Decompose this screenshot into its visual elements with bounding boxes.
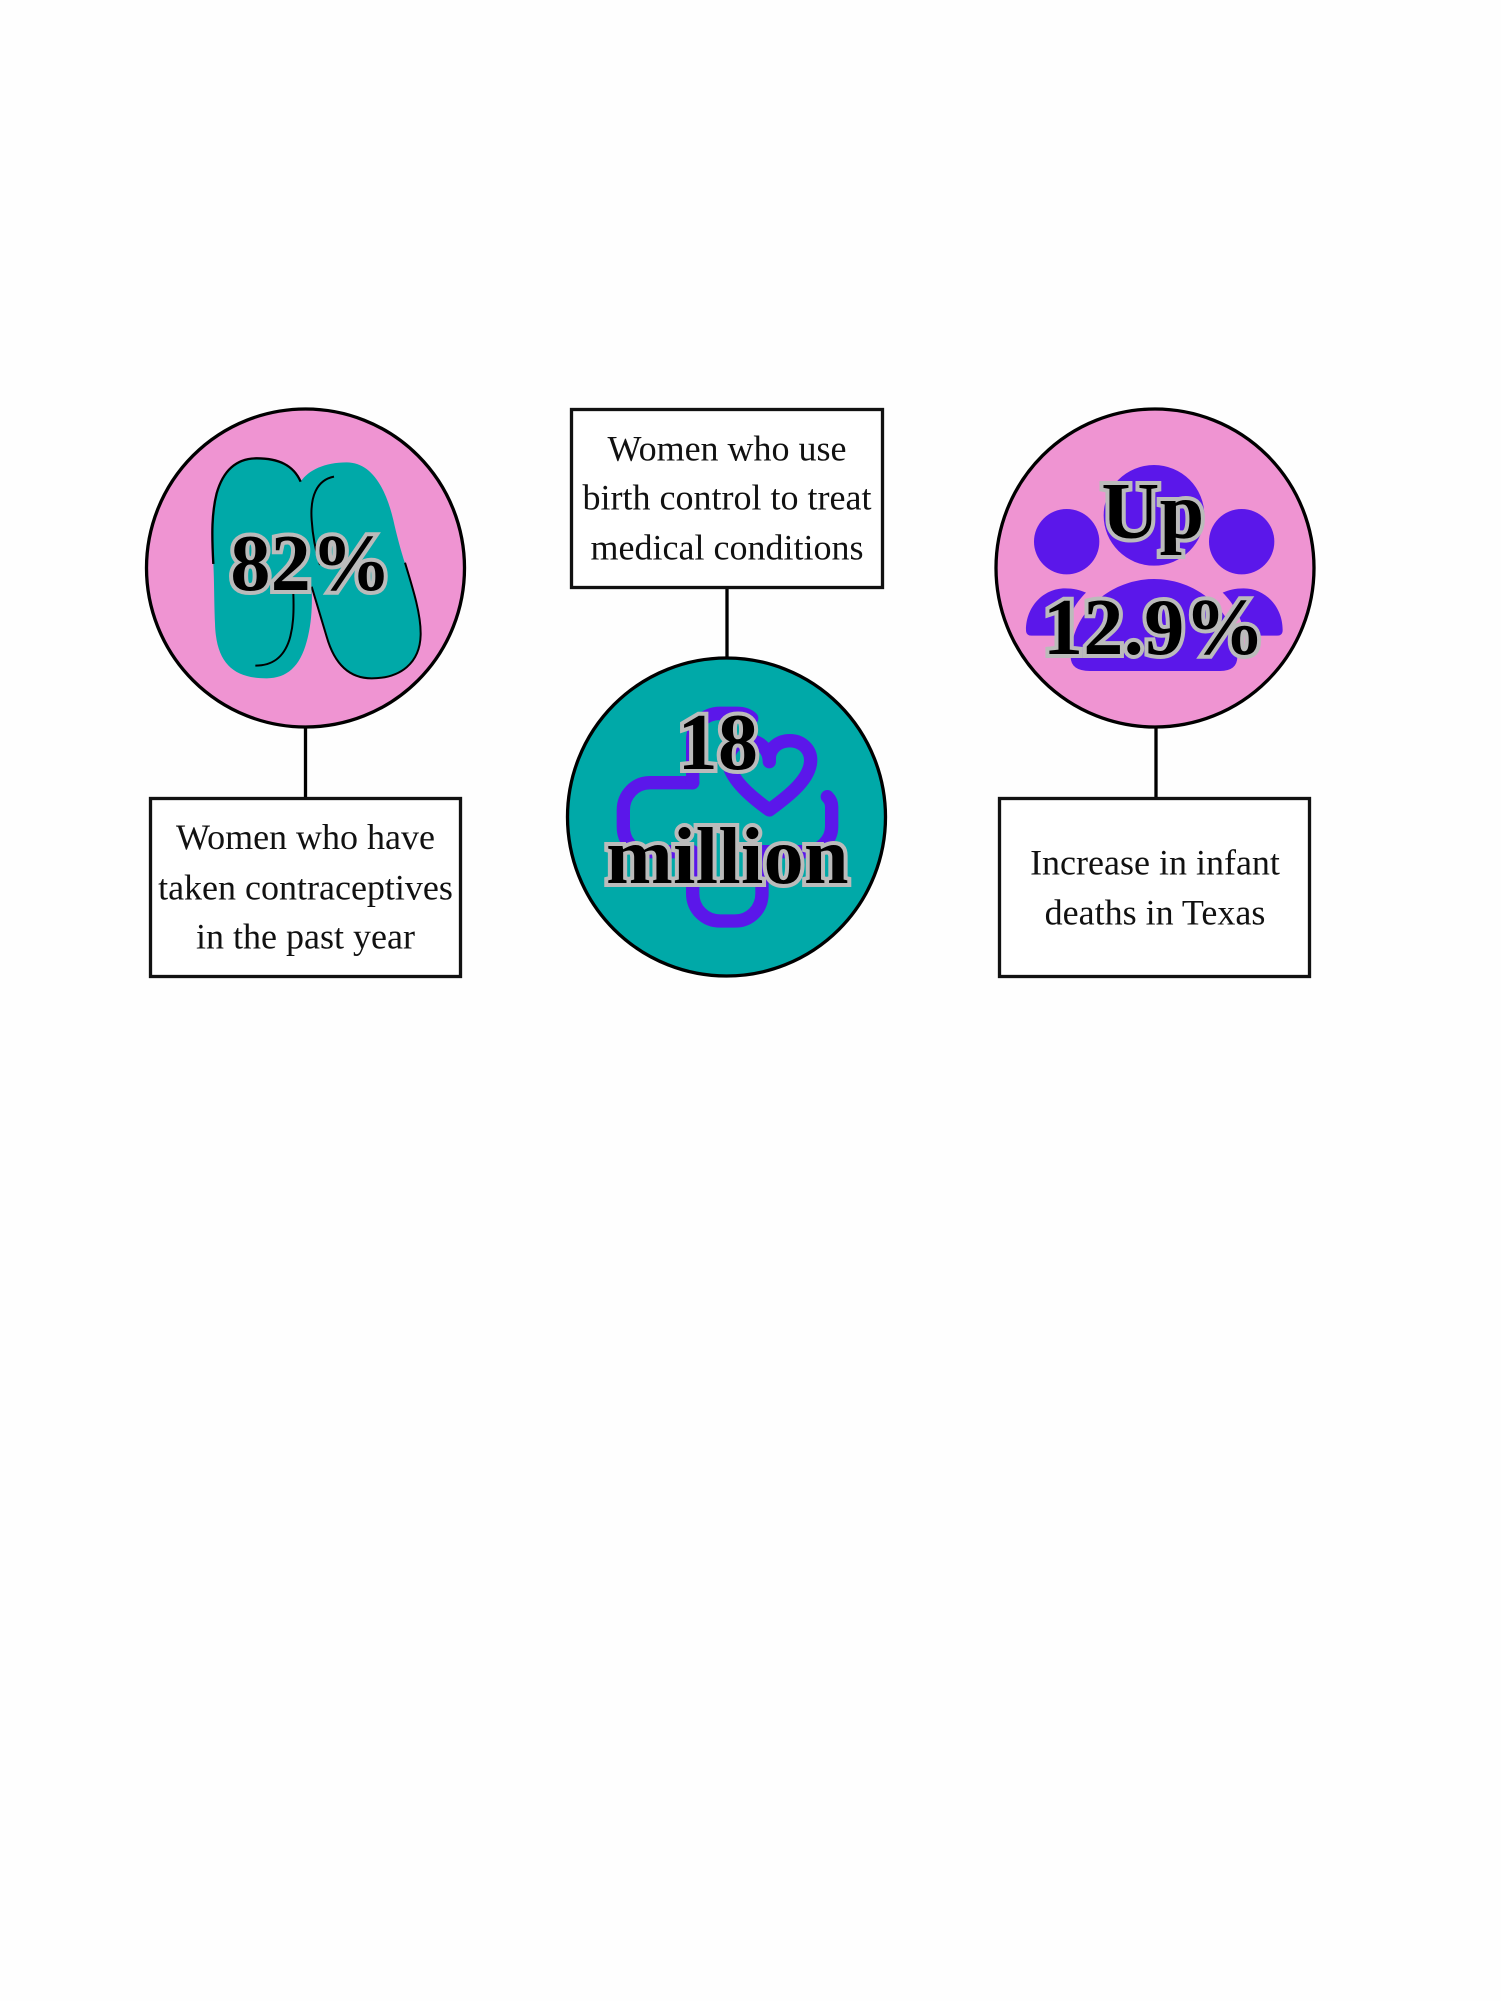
- panel: contraceptive use: [146, 409, 464, 976]
- caption box: [150, 798, 460, 976]
- stat: 18 million: [606, 699, 849, 901]
- panel: medical conditions: [568, 410, 886, 976]
- teal circle: [568, 658, 886, 976]
- pink circle: [996, 409, 1314, 727]
- stat: 18 million: million: [606, 813, 849, 901]
- stat: up 12.9%: [1043, 468, 1265, 672]
- icon: pills: [212, 458, 421, 678]
- caption box: medical conditions: [591, 528, 863, 568]
- pink circle: [146, 409, 464, 727]
- caption box: Women who use: [607, 428, 847, 468]
- caption box: Increase in infant: [1030, 842, 1280, 882]
- connector line: [725, 589, 729, 658]
- caption box: deaths in Texas: [1045, 892, 1265, 932]
- caption box: birth control to treat: [583, 478, 871, 518]
- icon: group of people: [1026, 465, 1283, 671]
- caption box: [572, 410, 882, 588]
- icon: cross with heart: [623, 713, 832, 921]
- stat: 18 million: 18: [678, 699, 758, 787]
- caption box: in the past year: [196, 916, 415, 956]
- caption box: taken contraceptives: [158, 868, 453, 908]
- stat: up 12.9%: Up: [1101, 468, 1205, 556]
- connector line: [1154, 728, 1158, 798]
- panel: infant deaths: [996, 409, 1314, 976]
- stat: 82%: 82%: [230, 520, 392, 608]
- caption box: Women who have: [176, 817, 435, 857]
- stat: up 12.9%: 12.9%: [1043, 584, 1265, 672]
- caption box: [1000, 798, 1310, 976]
- connector line: [304, 728, 307, 798]
